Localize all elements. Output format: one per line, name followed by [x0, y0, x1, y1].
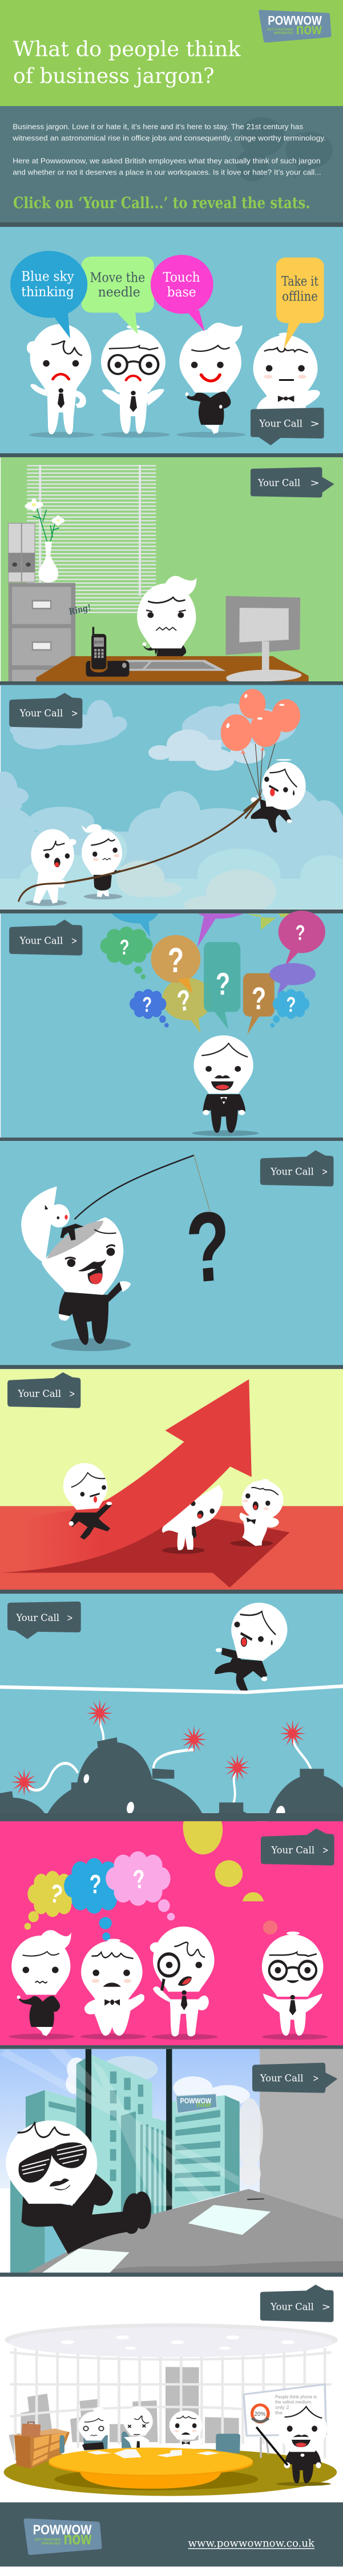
panel: jargon speech bubbles: [0, 227, 343, 457]
thought clouds: ?: [132, 1863, 147, 1895]
desk: [26, 2189, 343, 2273]
title: What do people think: [13, 38, 241, 62]
title: [13, 38, 241, 88]
footer logo: now: [63, 2529, 92, 2549]
papers and pen: [42, 2199, 271, 2273]
question bubbles: [100, 911, 325, 1034]
growth arrow: [0, 1379, 252, 1573]
panel: phone call from boss: [0, 457, 343, 685]
papers on table: [87, 2449, 219, 2458]
character: man with glasses: [262, 1932, 323, 2035]
binders: [9, 523, 35, 582]
light rays: [0, 2049, 239, 2212]
tightrope: [0, 1686, 343, 1692]
decorative speech bubbles: [236, 117, 333, 181]
speech bubble: Touch base: [151, 255, 213, 332]
speech bubble: Take it offline: [276, 258, 324, 349]
footer logo: [23, 2518, 102, 2555]
intro text: witnessed an astronomical rise in office jobs and consequently, cringe worthy terminology.: [12, 135, 326, 142]
intro text: and whether or not it deserves a place in our workspaces. Is it love or hate? It’s your call...: [13, 169, 321, 176]
bomb highlights: [83, 1773, 286, 1822]
button: your call: >: [67, 1612, 73, 1624]
filing cabinet: [9, 583, 75, 681]
character: man with bow tie: [81, 1939, 144, 2035]
window frame grid: [10, 2348, 332, 2458]
thought clouds: ?: [47, 1878, 65, 1910]
speech bubble: Blue sky thinking: [10, 251, 87, 338]
powwownow sign: now: [196, 2100, 212, 2109]
whiteboard: [244, 2384, 326, 2458]
whiteboard: 20%: [254, 2411, 266, 2417]
lower clouds: [0, 785, 343, 909]
button: your call: >: [310, 418, 320, 429]
chairs: [59, 2431, 240, 2453]
shadows: [75, 1524, 273, 1554]
logo: GET TOGETHER,: [267, 29, 294, 31]
title: of business jargon?: [13, 64, 215, 88]
question bubbles: ?: [120, 936, 130, 959]
panel: confused man with question bubbles: [0, 909, 343, 1141]
logo: POWWOW: [268, 14, 322, 28]
shadow: [276, 2482, 331, 2486]
panel: balloons and rope: [0, 685, 343, 914]
button: your call: >: [322, 1166, 328, 1177]
button: your call: Your Call: [259, 418, 302, 429]
intro text: [12, 123, 326, 176]
whiteboard: the safest medium,: [275, 2399, 312, 2405]
intro text: Here at Powwownow, we asked British employees what they actually think of such jargon: [13, 157, 320, 165]
button: your call: [7, 1372, 80, 1408]
shadows: [25, 893, 122, 906]
desk: [36, 656, 309, 681]
button: your call: >: [322, 1844, 329, 1856]
cabinet and briefcase: [14, 2422, 70, 2469]
character: stressed woman: [137, 576, 196, 657]
shadows: [29, 432, 245, 438]
character: tightrope walker: [215, 1603, 287, 1693]
footer logo: WHENEVER.: [42, 2542, 62, 2546]
keyboard: [126, 660, 226, 671]
character: relaxed boss with shades: [6, 2120, 151, 2254]
character: startled man: [240, 1479, 284, 1546]
button: your call: [260, 1151, 333, 1187]
powwownow sign: [176, 2094, 217, 2114]
pointer: [256, 2427, 288, 2465]
logo: now: [296, 21, 322, 38]
speech bubble: Move the needle: needle: [98, 285, 140, 300]
character: presenter: [278, 2405, 327, 2483]
logo: WHENEVER.: [274, 32, 294, 35]
arrow shadow: [0, 1517, 290, 1587]
button: your call: Your Call: [19, 934, 63, 946]
footer: [0, 2502, 343, 2566]
balloons: [221, 689, 300, 798]
monitor: [226, 596, 301, 681]
thought clouds: ?: [89, 1869, 102, 1899]
character: floating man: [251, 759, 306, 832]
sparks: [11, 1699, 306, 1796]
shadow: [192, 1130, 259, 1136]
button: your call (right arrow): [251, 467, 334, 498]
footer logo: POWWOW: [33, 2522, 92, 2538]
button: your call: [9, 920, 82, 956]
question bubbles: ?: [216, 967, 230, 1002]
bombs: [0, 1737, 343, 1911]
button: your call: >: [69, 1388, 75, 1400]
rope: [19, 798, 261, 901]
whiteboard: People think phone is: [275, 2394, 317, 2399]
character: squashed man: [162, 1485, 223, 1550]
panel: fishing for questions: [0, 1141, 343, 1367]
character: man pulling rope: [31, 829, 76, 904]
thought clouds: [25, 1851, 175, 1940]
button: your call: >: [313, 2073, 319, 2084]
character: man with magnifying glass: [150, 1927, 215, 2037]
vase with flowers: [25, 498, 64, 582]
panel: meeting room: [0, 2273, 343, 2502]
button: your call: [260, 2285, 333, 2322]
back clouds: [0, 700, 296, 813]
question bubbles: ?: [168, 941, 184, 980]
question mark: ?: [184, 1189, 233, 1304]
button: your call (right arrow): Your Call: [257, 477, 300, 489]
fuses: [29, 1716, 311, 1803]
character: man with glasses: [101, 325, 166, 434]
shadows: [9, 2034, 328, 2039]
question bubbles: ?: [286, 993, 296, 1017]
window frames: [86, 2049, 172, 2224]
intro panel: [0, 106, 343, 227]
button: your call: >: [322, 2302, 330, 2313]
question bubbles: ?: [296, 921, 305, 945]
character: man with moustache: [194, 1035, 253, 1133]
panel: growth arrow: [0, 1365, 343, 1594]
speech bubble: Touch base: base: [167, 285, 196, 300]
front cloud: [148, 729, 265, 771]
shadow: [51, 1338, 131, 1351]
button: your call: Your Call: [15, 1612, 59, 1624]
character: woman pulling rope: [82, 824, 122, 897]
whiteboard: the: [275, 2410, 283, 2416]
character: frowning man: [27, 324, 91, 434]
ceiling: [5, 2323, 338, 2357]
telephone: [86, 627, 130, 677]
speech bubble: Take it offline: offline: [282, 289, 318, 304]
button: your call: >: [71, 707, 78, 719]
fishing rod: [75, 1155, 194, 1219]
button: your call: [9, 693, 82, 729]
button: your call: Your Call: [270, 1166, 314, 1177]
window blinds: [27, 465, 156, 614]
character: man with bow tie: [253, 332, 320, 411]
speech bubble: Move the needle: [82, 257, 154, 334]
panel: tightrope over bombs: [0, 1594, 343, 1911]
button: your call: [261, 1829, 334, 1866]
button: your call: Your Call: [270, 2302, 314, 2313]
button: your call: Your Call: [271, 1844, 314, 1856]
speech bubble: Blue sky thinking: thinking: [21, 284, 74, 299]
button: your call (right arrow): >: [310, 477, 320, 489]
powwownow sign: POWWOW: [180, 2097, 212, 2106]
logo: [259, 10, 332, 43]
buildings: [0, 2054, 240, 2273]
whiteboard: only 2: [275, 2405, 289, 2410]
speech bubble: Touch base: Touch: [163, 270, 200, 285]
question bubbles: ?: [142, 993, 152, 1017]
intro text: Business jargon. Love it or hate it, it’s here and it’s here to stay. The 21st century has: [13, 123, 303, 131]
skyline: [9, 2367, 239, 2464]
question bubbles: ?: [252, 982, 266, 1017]
website url: www.powwownow.co.uk: [188, 2538, 315, 2549]
panel: thought clouds: [0, 1813, 343, 2049]
telephone: BOSS: [95, 641, 103, 645]
characters at table: [78, 2407, 203, 2450]
character: running man: [61, 1461, 112, 1539]
character: woman: [11, 1930, 71, 2036]
clouds through window: [66, 2056, 263, 2185]
button: your call: Your Call: [260, 2073, 304, 2084]
button: your call: [7, 1602, 81, 1639]
speech bubble: Take it offline: Take it: [281, 274, 318, 289]
rope front: [19, 871, 120, 901]
button: your call: >: [71, 934, 77, 946]
button: your call: Your Call: [19, 707, 63, 719]
button: your call: [252, 2063, 337, 2093]
question bubbles: ?: [175, 983, 192, 1018]
ring label: Ring!: [68, 602, 92, 617]
character: man fishing from his head: [21, 1187, 131, 1345]
header panel: [0, 0, 343, 106]
floor: [4, 2449, 337, 2496]
button: your call: Your Call: [17, 1388, 61, 1400]
fishing line: [194, 1155, 210, 1216]
speech bubble: Blue sky thinking: Blue sky: [21, 269, 74, 284]
panel: boss relaxing in office: [0, 2049, 343, 2273]
speech bubble: Move the needle: Move the: [90, 270, 145, 285]
button: your call: [251, 408, 324, 445]
decorative yellow circles: [183, 1821, 264, 1901]
character: smiling woman: [179, 323, 242, 434]
table: [49, 2448, 253, 2489]
footer logo: GET TOGETHER,: [35, 2538, 62, 2542]
